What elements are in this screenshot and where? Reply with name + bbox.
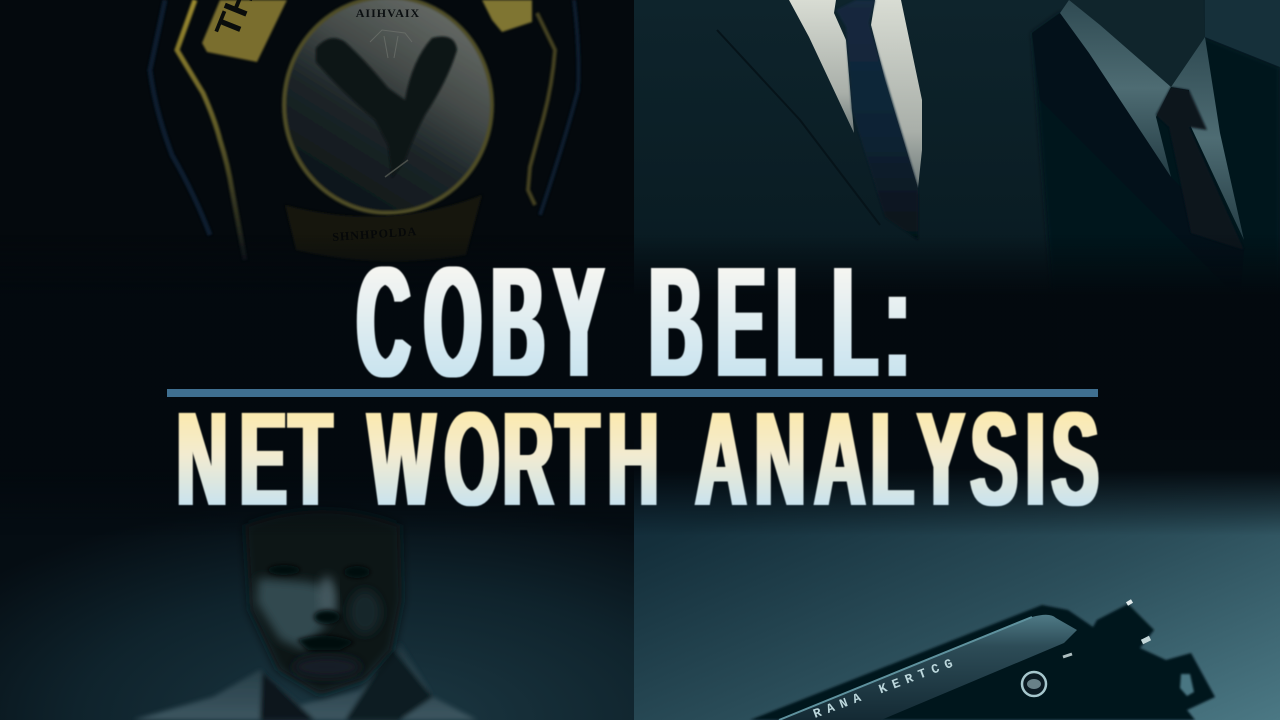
icon: badge medallion bbox=[284, 0, 492, 213]
heading: Coby Bell: COBY BELL: bbox=[357, 234, 909, 409]
panel: badge bbox=[0, 0, 634, 390]
icon: bottom banner bbox=[285, 195, 482, 261]
icon: shield outline bbox=[150, 0, 578, 260]
icon: yellow plate with lettering bbox=[202, 0, 287, 62]
panel: pistol bbox=[634, 440, 1280, 720]
grip hole bbox=[1180, 674, 1194, 696]
icon: bottom banner: SHNHPOLDA bbox=[332, 224, 418, 244]
engraved lettering: RANA KERTCG bbox=[811, 654, 961, 720]
icon: eagle wings bbox=[316, 36, 457, 178]
emblem bbox=[1022, 672, 1046, 696]
man's face bbox=[245, 510, 402, 695]
slide bbox=[779, 615, 1077, 720]
heading: Net Worth Analysis: NET WORTH ANALYSIS bbox=[176, 384, 1099, 534]
man in dark suit, white shirt bbox=[717, 0, 922, 240]
man's jacket bbox=[133, 643, 477, 720]
pistol body bbox=[750, 601, 1215, 720]
panel: suits bbox=[634, 0, 1280, 400]
title divider bbox=[167, 389, 1098, 397]
title bbox=[167, 234, 1099, 534]
icon: right yellow plate bbox=[482, 0, 532, 32]
icon: badge medallion: AIIHVAIX bbox=[356, 6, 420, 20]
panel: portrait bbox=[0, 440, 634, 720]
dark title band bbox=[0, 235, 1280, 535]
man in dark suit, grey shirt bbox=[1032, 0, 1280, 400]
